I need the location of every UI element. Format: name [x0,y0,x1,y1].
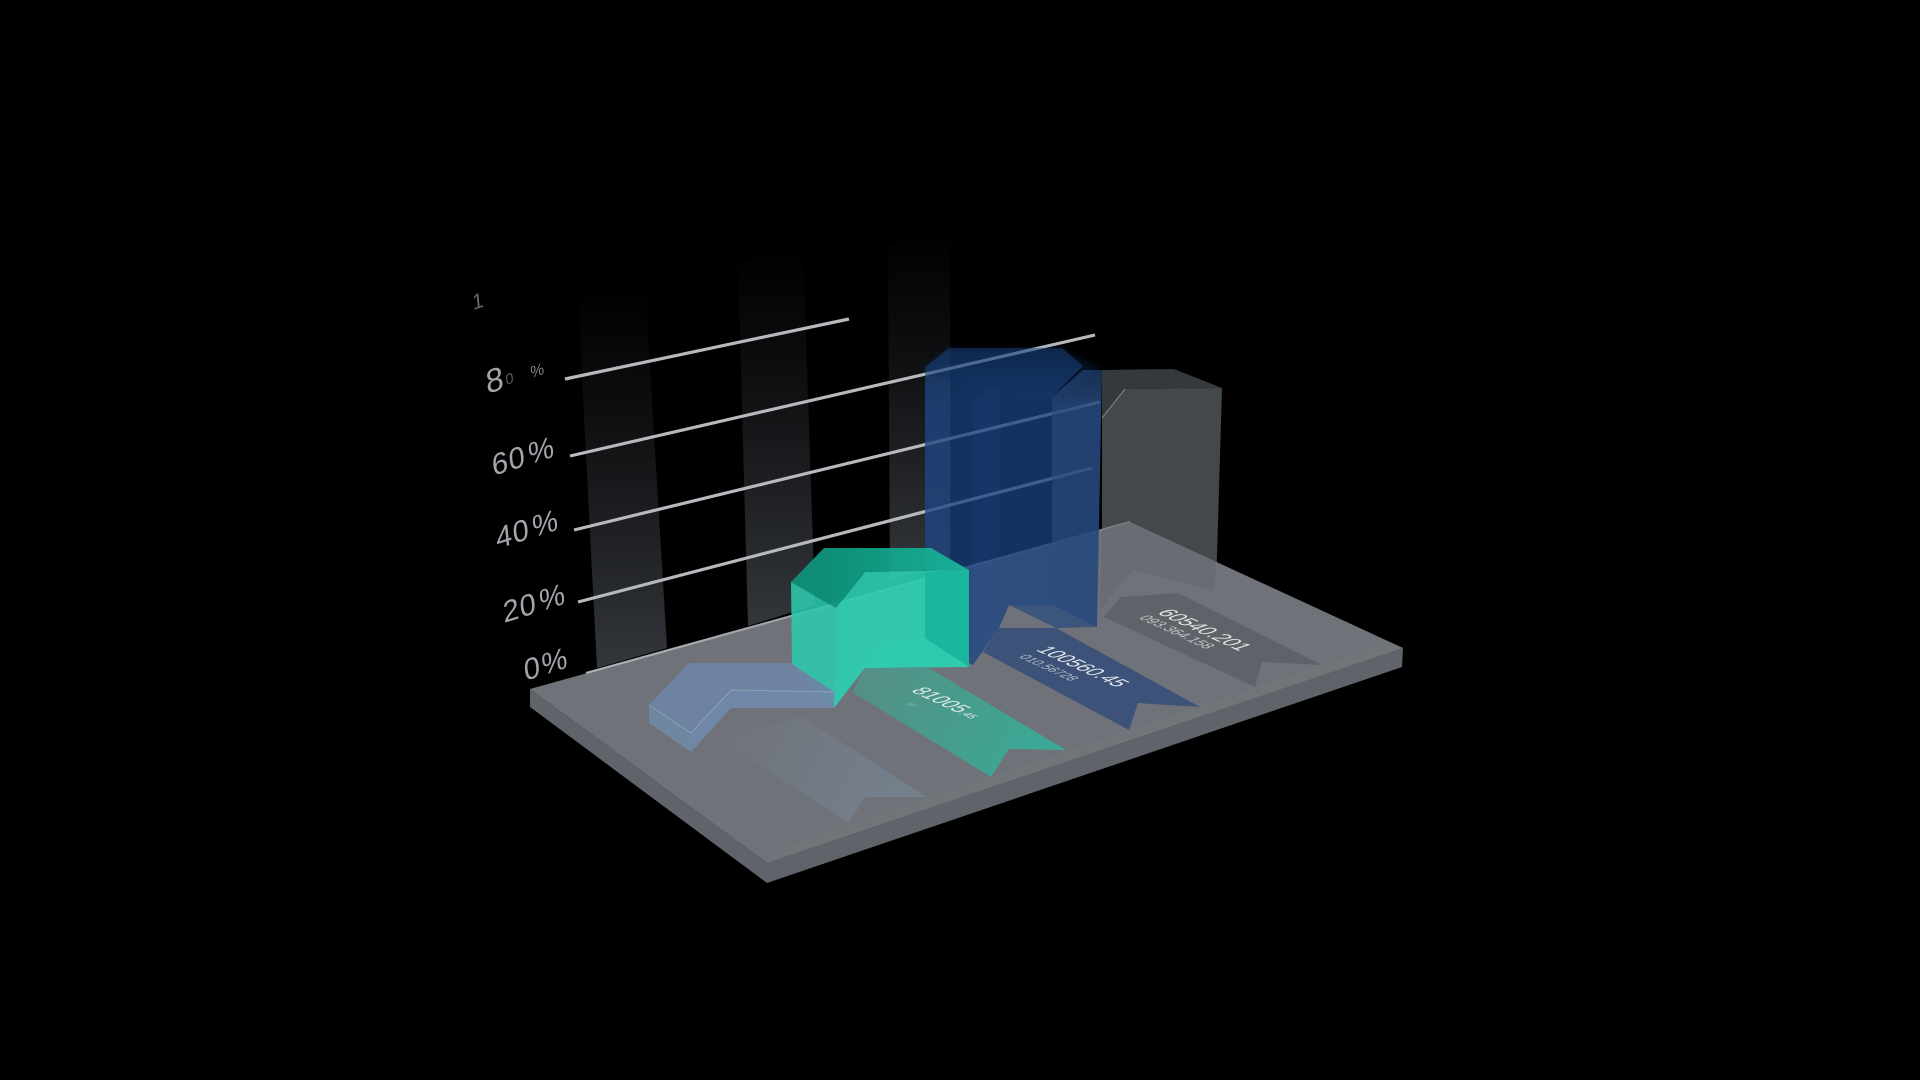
value: teal ribbon: 81005.45 [905,685,989,721]
axis labels: % [530,361,545,382]
value: grey ribbon: 093.364.158 [1134,614,1218,650]
teal bar [791,548,969,708]
grey bar back [1102,369,1222,590]
axis labels: 8 [484,359,505,401]
axis labels: 0 [505,370,514,389]
value: navy ribbon: 100560.45 [1030,644,1135,689]
navy bar [925,348,1102,665]
light blue bar [649,663,834,752]
axis labels: 60% [490,430,556,483]
axis labels: 0% [522,641,570,688]
background columns [578,232,950,668]
axis labels: 20% [501,577,567,630]
gridlines [565,319,1100,602]
value: navy ribbon: 010.56728 [1015,653,1083,682]
grey bar front over platform [1100,522,1216,610]
axis labels: 1 [471,289,485,315]
axis labels: 40% [494,503,560,556]
axis labels [471,289,570,688]
value: teal ribbon: 00 [904,702,918,708]
value: grey ribbon: 60540.201 [1151,607,1258,653]
ribbon: navy [983,628,1200,730]
ribbon: grey [1104,593,1322,687]
ribbon: teal [852,668,1066,777]
platform [530,522,1403,883]
ribbon: light blue [716,717,927,823]
